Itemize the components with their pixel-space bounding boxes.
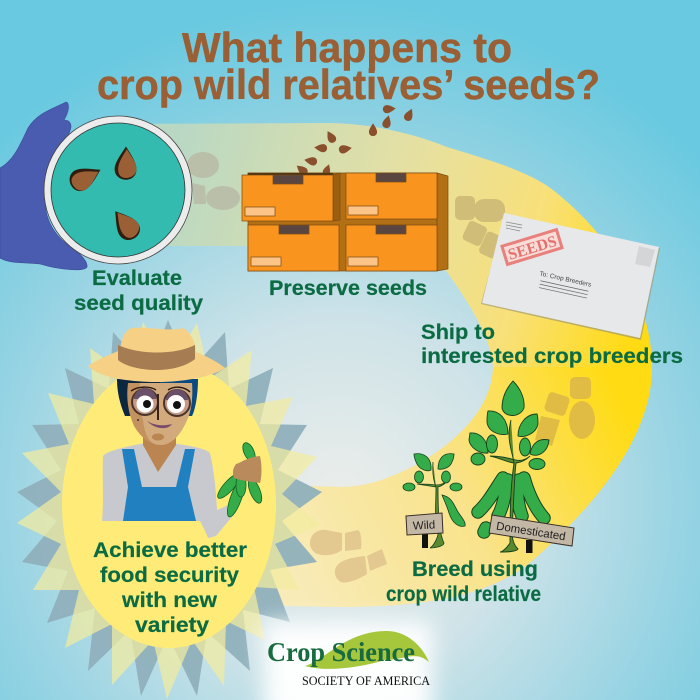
return address bbox=[506, 222, 522, 231]
plant: domesticated bbox=[469, 381, 549, 552]
box: bottom left bbox=[248, 225, 339, 271]
blue spikes bbox=[17, 320, 322, 696]
seeds stamp bbox=[500, 228, 564, 266]
label: evaluate seed quality: Evaluate bbox=[92, 267, 182, 290]
panel: petri dish bbox=[44, 116, 192, 264]
cheek highlight bbox=[138, 383, 192, 445]
label: evaluate seed quality: seed quality bbox=[74, 292, 203, 315]
title: What happens to bbox=[182, 24, 512, 71]
label: breed using crop wild relative bbox=[386, 558, 541, 606]
title bbox=[97, 24, 600, 108]
falling seeds bbox=[294, 104, 416, 177]
yellow spikes bbox=[17, 322, 320, 699]
label: breed using crop wild relative: Breed using bbox=[412, 558, 538, 581]
label: preserve seeds: Preserve seeds bbox=[269, 277, 427, 300]
overalls bbox=[122, 449, 196, 521]
face bbox=[127, 383, 192, 445]
farmer bbox=[88, 328, 265, 538]
title: crop wild relatives’ seeds? bbox=[97, 61, 600, 108]
sign: domesticated bbox=[489, 515, 574, 553]
hat bbox=[88, 328, 225, 382]
logo: Crop Science Society of America bbox=[267, 631, 430, 688]
pods bbox=[478, 478, 544, 532]
shirt bbox=[102, 443, 236, 538]
logo glow bbox=[264, 622, 432, 700]
journey path band bbox=[110, 123, 652, 607]
chin bbox=[152, 434, 164, 440]
leaf bbox=[305, 631, 429, 669]
hand bbox=[233, 456, 262, 483]
sunburst bbox=[17, 320, 322, 699]
footprints bbox=[187, 152, 595, 583]
mouth bbox=[147, 421, 172, 428]
label: ship to interested crop breeders bbox=[421, 321, 683, 368]
stamp bbox=[635, 246, 655, 267]
seed bbox=[115, 146, 136, 180]
panel: seed storage boxes bbox=[242, 173, 448, 271]
label: breed using crop wild relative: crop wild relative bbox=[386, 583, 541, 606]
soybean pods bbox=[215, 441, 265, 519]
label: ship to interested crop breeders: Ship to bbox=[421, 321, 495, 344]
address bbox=[537, 270, 593, 299]
logo: Crop Science Society of America: Crop Science bbox=[267, 637, 415, 667]
stem bbox=[490, 420, 530, 552]
sign: wild bbox=[406, 513, 443, 548]
yellow oval bbox=[62, 362, 276, 648]
label: achieve better food security bbox=[93, 539, 247, 637]
seed bbox=[106, 205, 144, 244]
sign: wild: Wild bbox=[413, 519, 436, 533]
seed bbox=[66, 160, 105, 195]
label: achieve better food security: Achieve better bbox=[93, 539, 247, 562]
sign: domesticated: Domesticated bbox=[495, 521, 566, 543]
label: achieve better food security: variety bbox=[135, 614, 209, 637]
nose bbox=[157, 394, 159, 420]
panel: envelope bbox=[481, 213, 660, 340]
box: top left drawer bbox=[242, 173, 340, 221]
logo: Crop Science Society of America: SOCIETY OF AMERICA bbox=[302, 674, 430, 688]
seeds stamp: SEEDS bbox=[506, 233, 559, 264]
hair bbox=[117, 379, 160, 416]
label: ship to interested crop breeders: interested crop breeders bbox=[421, 345, 683, 368]
box: bottom right bbox=[346, 225, 437, 271]
neck bbox=[143, 426, 176, 472]
label: evaluate seed quality bbox=[74, 267, 203, 315]
label: achieve better food security: food security bbox=[100, 564, 239, 587]
icon: gloved hand bbox=[0, 102, 87, 270]
box: top right bbox=[346, 173, 437, 219]
address: To: Crop Breeders bbox=[539, 270, 593, 289]
leaves bbox=[502, 381, 524, 416]
glasses and eyes bbox=[131, 387, 190, 416]
label: achieve better food security: with new bbox=[121, 589, 218, 612]
mole bbox=[137, 419, 139, 421]
plant: wild bbox=[403, 454, 465, 548]
